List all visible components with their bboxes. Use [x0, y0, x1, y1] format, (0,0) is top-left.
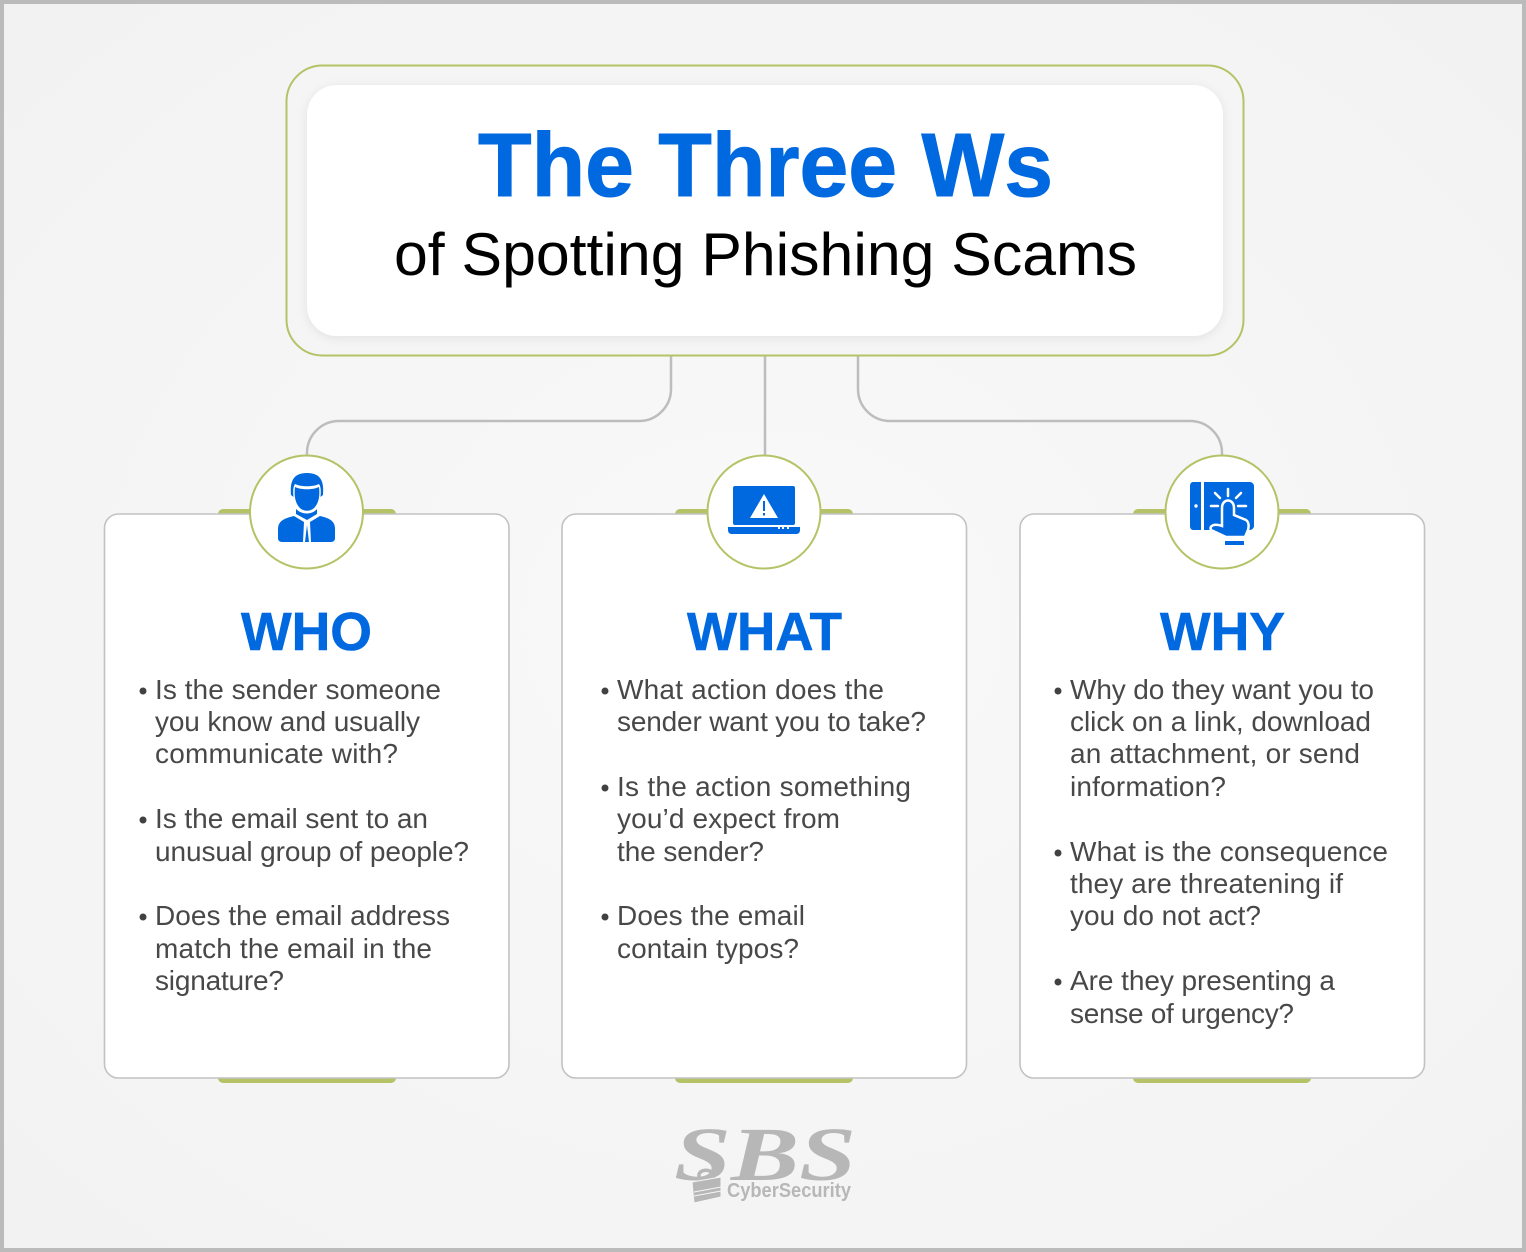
list: what questions: you’d expect from	[617, 803, 840, 834]
list: who questions: you know and usually	[155, 706, 420, 737]
list: why questions: an attachment, or send	[1070, 738, 1360, 769]
panel: what	[562, 456, 966, 1083]
list: why questions: you do not act?	[1070, 900, 1261, 931]
list: who questions: Is the email sent to an	[155, 803, 428, 834]
list: what questions: Does the email	[617, 900, 805, 931]
heading: why: WHY	[1160, 602, 1285, 662]
list: who questions: signature?	[155, 965, 284, 996]
panel: why	[1020, 456, 1424, 1083]
logo: SBS CyberSecurity: SBS	[674, 1113, 856, 1197]
list: what questions: sender want you to take?	[617, 706, 926, 737]
list: who questions	[140, 674, 469, 996]
heading: who: WHO	[241, 602, 372, 662]
icon: laptop warning	[728, 486, 800, 534]
logo: SBS CyberSecurity: CyberSecurity	[727, 1180, 852, 1202]
list: why questions	[1054, 674, 1388, 1029]
panel: who	[104, 456, 509, 1083]
list: who questions: communicate with?	[155, 738, 398, 769]
list: why questions: Why do they want you to	[1070, 674, 1374, 705]
list: who questions: unusual group of people?	[155, 836, 469, 867]
title: The Three Ws	[478, 116, 1053, 216]
list: what questions: contain typos?	[617, 933, 799, 964]
list: why questions: Are they presenting a	[1070, 965, 1335, 996]
list: what questions	[602, 674, 926, 964]
list: what questions: What action does the	[617, 674, 884, 705]
icon: person	[278, 473, 335, 542]
list: why questions: information?	[1070, 771, 1226, 802]
title panel	[286, 66, 1244, 356]
icon: padlock	[692, 1170, 721, 1203]
list: who questions: Is the sender someone	[155, 674, 441, 705]
list: why questions: sense of urgency?	[1070, 998, 1294, 1029]
connector lines	[307, 356, 1222, 456]
list: what questions: the sender?	[617, 836, 764, 867]
list: why questions: they are threatening if	[1070, 868, 1343, 899]
list: why questions: What is the consequence	[1070, 836, 1388, 867]
icon: touch screen	[1190, 482, 1254, 545]
logo: SBS CyberSecurity	[674, 1113, 856, 1203]
heading: what: WHAT	[687, 602, 842, 662]
subtitle: of Spotting Phishing Scams	[394, 221, 1137, 288]
list: who questions: Does the email address	[155, 900, 450, 931]
list: who questions: match the email in the	[155, 933, 432, 964]
list: why questions: click on a link, download	[1070, 706, 1371, 737]
list: what questions: Is the action something	[617, 771, 911, 802]
